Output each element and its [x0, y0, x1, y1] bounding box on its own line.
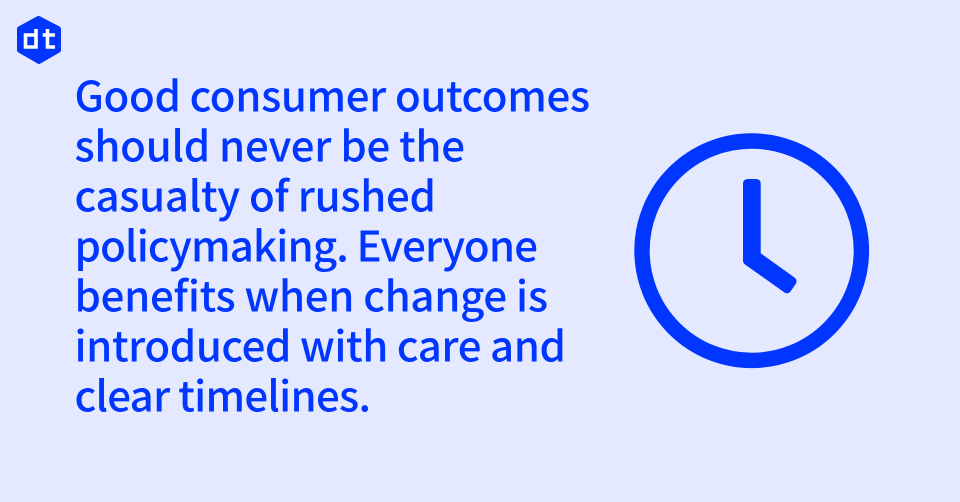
- icon: dt hexagon logo: [18, 16, 60, 64]
- quote text: benefits when change is: [74, 264, 548, 324]
- icon: clock: [642, 141, 861, 360]
- quote text: casualty of rushed: [74, 164, 436, 224]
- quote text: [74, 64, 590, 424]
- quote text: policymaking. Everyone: [74, 214, 538, 274]
- quote text: introduced with care and: [74, 314, 566, 374]
- quote text: should never be the: [74, 114, 465, 174]
- quote text: clear timelines.: [74, 364, 371, 424]
- quote text: Good consumer outcomes: [74, 64, 590, 124]
